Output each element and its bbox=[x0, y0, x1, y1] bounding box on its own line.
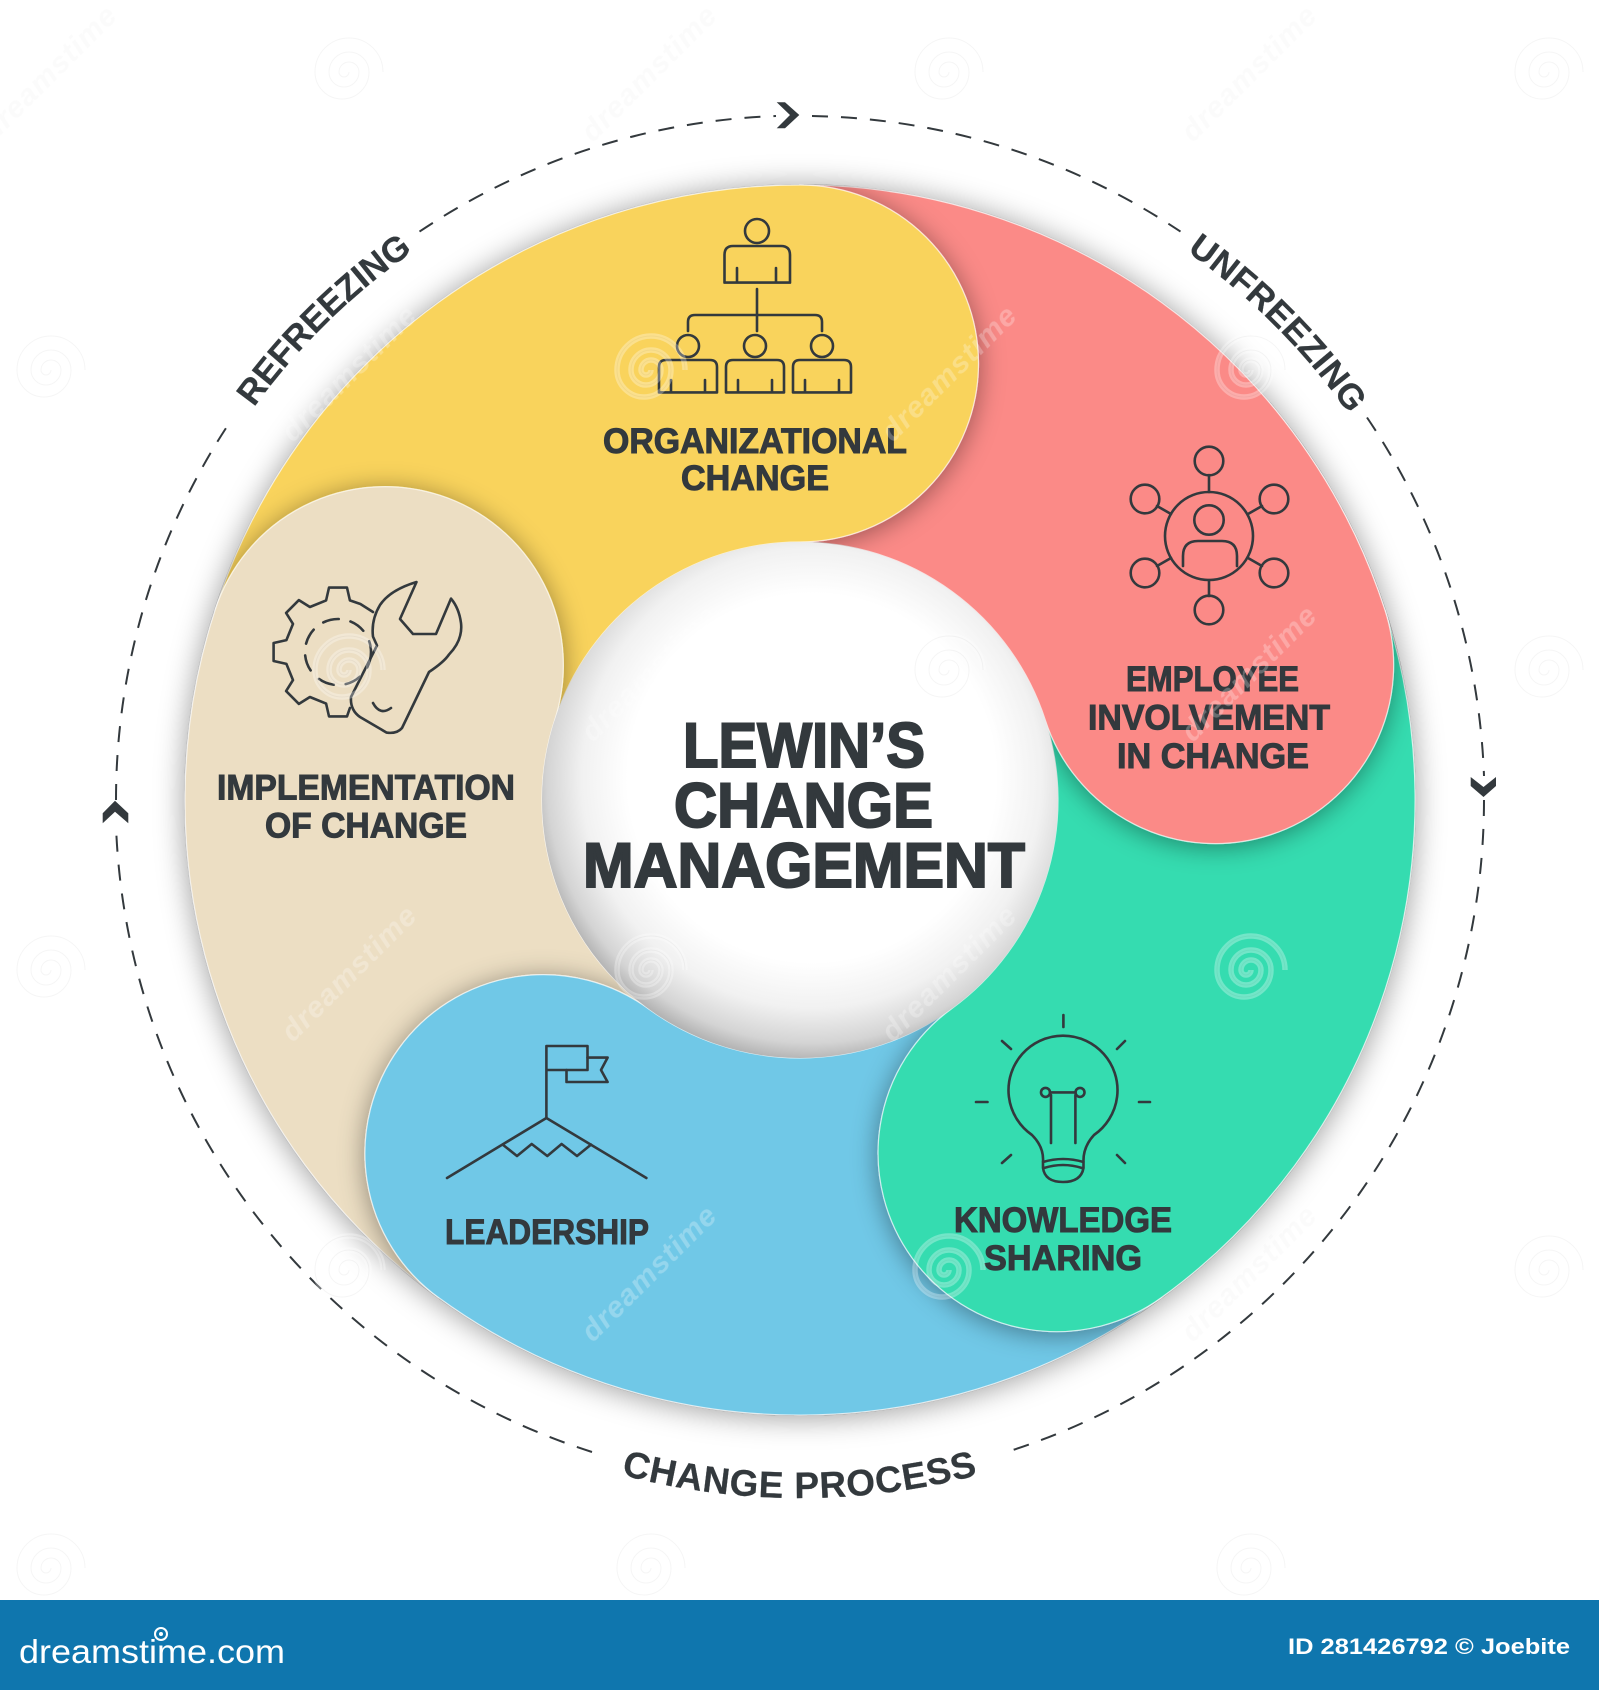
icon: light bulb bbox=[976, 1015, 1150, 1182]
footer credit: ID 281426792 © Joebite bbox=[1288, 1634, 1570, 1659]
arrow: right bbox=[1471, 777, 1496, 797]
label: knowledge sharing bbox=[954, 1201, 1172, 1278]
label: refreezing: REFREEZING bbox=[236, 236, 410, 406]
watermark text: dreamstime bbox=[275, 899, 424, 1048]
watermark text: dreamstime bbox=[1175, 599, 1324, 748]
icon: organization chart bbox=[659, 219, 851, 392]
watermark text: dreamstime bbox=[875, 899, 1024, 1048]
label: organizational change bbox=[603, 422, 907, 498]
title: CHANGE bbox=[674, 771, 933, 841]
title: MANAGEMENT bbox=[583, 831, 1025, 901]
watermark text: dreamstime bbox=[275, 299, 424, 448]
footer logo: dreamstime.com bbox=[19, 1633, 285, 1670]
ring outer shadow bbox=[183, 185, 1417, 1419]
watermark text: dreamstime bbox=[575, 599, 724, 748]
label: implementation of change: OF CHANGE bbox=[265, 806, 467, 846]
label: unfreezing: UNFREEZING bbox=[1192, 233, 1364, 410]
center circle bbox=[542, 542, 1058, 1058]
panel: implementation of change bbox=[184, 472, 646, 1304]
label: knowledge sharing: SHARING bbox=[984, 1239, 1142, 1278]
label: knowledge sharing: KNOWLEDGE bbox=[954, 1201, 1172, 1240]
panel: employee involvement in change (head) bbox=[1042, 400, 1408, 864]
panel: employee involvement in change (body) bbox=[794, 184, 1404, 682]
watermark text: dreamstime bbox=[1175, 1199, 1324, 1348]
watermark text: dreamstime bbox=[575, 0, 724, 148]
label: organizational change: ORGANIZATIONAL bbox=[603, 422, 907, 461]
icon: people network bbox=[1131, 447, 1288, 624]
label: employee involvement in change: IN CHANGE bbox=[1117, 737, 1309, 776]
label: employee involvement in change: INVOLVEMENT bbox=[1088, 698, 1330, 738]
label: implementation of change: IMPLEMENTATION bbox=[217, 768, 515, 808]
arrow: left bbox=[103, 801, 128, 823]
label: change process: CHANGE PROCESS bbox=[624, 1452, 975, 1498]
colour ring panels bbox=[184, 184, 1416, 1416]
watermark text: dreamstime bbox=[875, 299, 1024, 448]
label: employee involvement in change: EMPLOYEE bbox=[1126, 660, 1299, 699]
label: organizational change: CHANGE bbox=[681, 459, 829, 498]
icon: flag on mountain bbox=[447, 1046, 646, 1178]
watermark text bbox=[0, 0, 1324, 1348]
footer bar bbox=[0, 1600, 1599, 1690]
icon: gear and wrench bbox=[274, 582, 461, 733]
panel: knowledge sharing bbox=[862, 607, 1416, 1352]
panel: leadership bbox=[348, 961, 1168, 1416]
watermark text: dreamstime bbox=[575, 1199, 724, 1348]
arrow: top bbox=[777, 102, 799, 128]
label: implementation of change bbox=[217, 768, 515, 846]
watermark text: dreamstime bbox=[1175, 0, 1324, 148]
panel: organizational change bbox=[215, 185, 979, 720]
label: employee involvement in change bbox=[1088, 660, 1330, 776]
dashed process ring bbox=[116, 116, 1484, 1453]
title bbox=[583, 711, 1025, 901]
title: LEWIN’S bbox=[683, 711, 925, 781]
label: leadership: LEADERSHIP bbox=[445, 1213, 649, 1252]
